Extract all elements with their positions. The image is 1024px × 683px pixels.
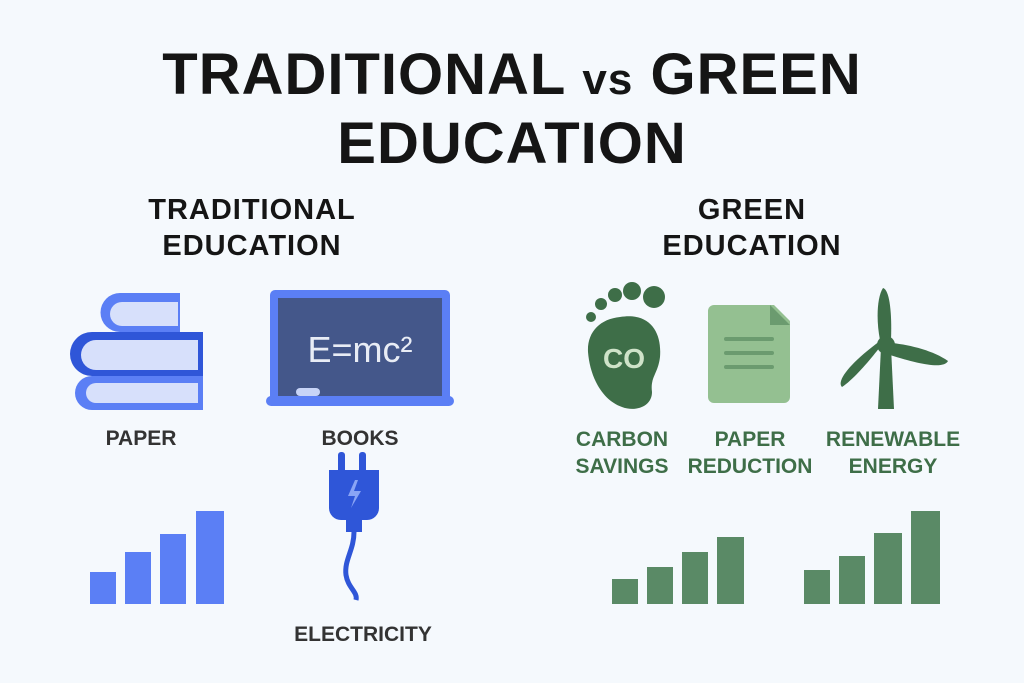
icon: chalkboard: E=mc²: [307, 329, 413, 370]
icon: plug: [329, 452, 379, 601]
label: paper: PAPER: [106, 427, 176, 450]
heading: traditional: TRADITIONAL: [148, 194, 356, 226]
label: carbon savings: SAVINGS: [576, 455, 668, 478]
bar chart: green 2: [804, 511, 940, 604]
icon: chalkboard: [266, 290, 454, 406]
icon: footprint: CO: [603, 343, 645, 374]
title: [162, 42, 862, 176]
icon: books: [70, 293, 203, 410]
bar chart: green 1: [612, 537, 744, 604]
heading: traditional: EDUCATION: [162, 230, 342, 262]
heading: green: EDUCATION: [662, 230, 842, 262]
label: carbon savings: CARBON: [576, 428, 668, 451]
label: renewable energy: RENEWABLE: [826, 428, 960, 451]
label: books: BOOKS: [321, 427, 398, 450]
label: paper reduction: [688, 428, 812, 478]
label: paper reduction: PAPER: [715, 428, 785, 451]
title: TRADITIONAL vs GREEN: [162, 42, 862, 107]
label: renewable energy: [826, 428, 960, 478]
heading: green: GREEN: [698, 194, 806, 226]
label: paper reduction: REDUCTION: [688, 455, 812, 478]
icon: document: [708, 305, 790, 403]
icon: footprint: [586, 282, 665, 409]
icon: wind turbine: [840, 288, 948, 409]
heading: traditional: [148, 194, 356, 262]
label: electricity: ELECTRICITY: [294, 623, 432, 646]
heading: green: [662, 194, 842, 262]
bar chart: traditional: [90, 511, 224, 604]
label: carbon savings: [576, 428, 668, 478]
label: renewable energy: ENERGY: [849, 455, 937, 478]
title: EDUCATION: [337, 111, 687, 176]
